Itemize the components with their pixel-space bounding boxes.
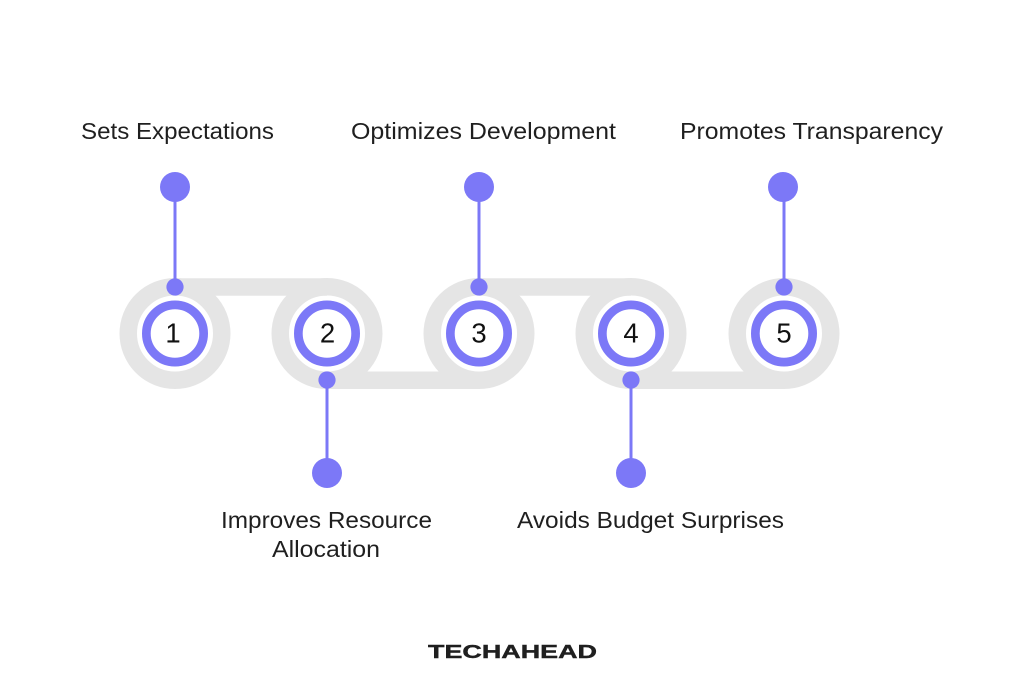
label: Avoids Budget Surprises: Avoids Budget Surprises [517, 507, 784, 533]
label: Improves Resource Allocation: Improves Resource [221, 507, 432, 533]
label: Improves Resource Allocation [221, 507, 432, 562]
logo: TECHAHEAD: TECHAHEAD [428, 641, 597, 662]
label: Improves Resource Allocation: Allocation [272, 536, 380, 562]
step 2: 2 [320, 318, 335, 348]
step 5 [755, 172, 813, 362]
step 3 [450, 172, 508, 362]
step 4: 4 [623, 318, 639, 348]
gray connector track [128, 287, 831, 380]
label: Sets Expectations: Sets Expectations [81, 118, 274, 144]
step 4 [602, 305, 660, 488]
label: Promotes Transparency: Promotes Transparency [680, 118, 944, 144]
step 1: 1 [165, 318, 181, 348]
step 5: 5 [776, 318, 792, 348]
label: Optimizes Development: Optimizes Development [351, 118, 617, 144]
step 1 [146, 172, 204, 362]
step 3: 3 [471, 318, 487, 348]
step 2 [298, 305, 356, 488]
